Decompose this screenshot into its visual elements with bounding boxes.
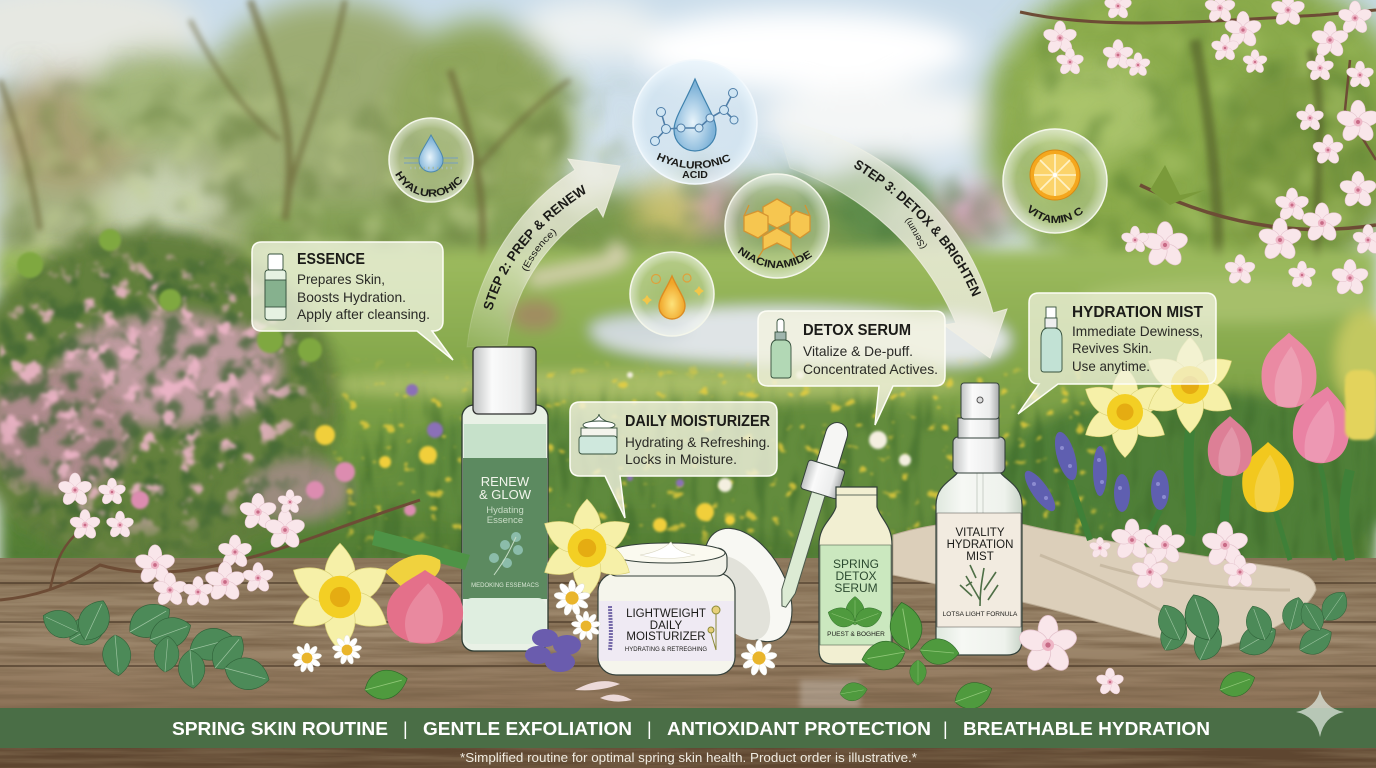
product: essence bottle: & GLOW <box>479 487 532 502</box>
daffodils <box>1079 366 1171 458</box>
product: moisturizer jar <box>598 542 735 675</box>
daffodil and tulip <box>385 555 441 590</box>
product: moisturizer jar: MOISTURIZER <box>626 631 706 643</box>
bottom banner <box>0 708 1376 748</box>
bottom banner: ANTIOXIDANT PROTECTION <box>667 719 931 739</box>
product: essence bottle: RENEW <box>481 474 530 489</box>
callout: detox serum <box>758 311 945 425</box>
sparkle mark <box>1296 690 1344 737</box>
callout: daily moisturizer: Hydrating & Refreshing. <box>625 434 770 450</box>
product: serum bottle: SERUM <box>834 581 878 595</box>
arrow: step 3 detox and brighten: (Serum) <box>902 216 929 251</box>
icon: serum bottle <box>771 319 791 378</box>
product: mist bottle: MIST <box>966 551 994 563</box>
callout: hydration mist: Immediate Dewiness, <box>1072 323 1203 339</box>
callout: essence: ESSENCE <box>297 251 365 268</box>
icon: mist bottle <box>1041 307 1062 372</box>
callout: detox serum: Concentrated Actives. <box>803 361 938 377</box>
product: essence bottle: Hydating <box>486 505 524 516</box>
bubble: niacinamide <box>724 173 830 279</box>
icon: mint leaf <box>825 596 885 631</box>
dropper <box>766 417 858 612</box>
bubble: niacinamide: NIACINAMIDE <box>738 246 812 268</box>
arrow: step 2 prep and renew: STEP 2: PREP & RENEW <box>484 184 586 310</box>
foreground right botanicals <box>361 519 1354 714</box>
callout: detox serum: Vitalize & De-puff. <box>803 343 913 359</box>
bottom banner: GENTLE EXFOLIATION <box>423 719 632 739</box>
callout: essence: Boosts Hydration. <box>297 289 406 305</box>
icon: lavender <box>608 605 613 650</box>
callout: essence: Prepares Skin, <box>297 271 385 287</box>
callout: hydration mist: Revives Skin. <box>1072 340 1152 356</box>
product: serum bottle: PUEST & BOGHER <box>827 631 885 638</box>
tulips <box>1261 333 1317 408</box>
product: serum bottle: DETOX <box>835 569 877 583</box>
wooden table <box>0 558 1376 710</box>
bubble: vitamin c <box>1002 128 1108 234</box>
callout: daily moisturizer <box>570 402 777 518</box>
bubble: hyaluronic small: HYALUROHIC <box>395 170 462 197</box>
callout: hydration mist: HYDRATION MIST <box>1072 304 1203 321</box>
bottom banner: | <box>647 719 652 739</box>
bubble: hyaluronic acid <box>632 60 758 185</box>
lower wood strip <box>0 748 1376 768</box>
bubble: oil droplet <box>630 252 714 336</box>
bottom banner: BREATHABLE HYDRATION <box>963 719 1210 739</box>
icon: essence bottle <box>265 254 286 320</box>
bubble: vitamin c: VITAMIN C <box>1028 204 1083 223</box>
icon: rosemary sprig <box>960 565 998 606</box>
bubble: hyaluronic acid: ACID <box>682 169 708 181</box>
callout: detox serum: DETOX SERUM <box>803 322 911 339</box>
icon: chamomile <box>708 606 720 650</box>
icon: cream jar <box>579 414 617 454</box>
jar lid <box>686 513 810 657</box>
icon: drop with molecule <box>650 79 738 151</box>
icon: golden oil drop <box>642 274 704 319</box>
callout: essence: Apply after cleansing. <box>297 306 430 322</box>
product: essence bottle: Essence <box>487 515 523 526</box>
flowering bush left <box>0 250 315 550</box>
product: dropper and lid <box>686 417 858 657</box>
product: mist bottle <box>936 383 1022 655</box>
background: spring park scene <box>0 0 1376 570</box>
towel <box>893 521 1316 648</box>
product: essence bottle <box>462 347 548 651</box>
muscari <box>1020 429 1169 515</box>
icon: honeycomb <box>744 199 810 258</box>
product: moisturizer jar: DAILY <box>650 620 683 632</box>
callout: daily moisturizer: Locks in Moisture. <box>625 451 737 467</box>
background spring flowers behind products <box>1020 333 1376 560</box>
callout: hydration mist <box>1018 293 1216 414</box>
product: mist bottle: HYDRATION <box>947 539 1013 551</box>
bubble: hyaluronic acid: HYALURONIC <box>656 152 730 169</box>
arrow: step 2 prep and renew <box>466 158 620 348</box>
lavender bunch <box>525 629 581 672</box>
product: moisturizer jar: HYDRATING & RETREGHING <box>625 647 707 653</box>
stems <box>1070 420 1350 560</box>
arrow: step 3 detox and brighten: STEP 3: DETOX & BRIGHTEN <box>854 160 981 297</box>
product: mist bottle: LOTSA LIGHT FORNULA <box>943 611 1018 618</box>
foreground left botanicals <box>0 473 777 695</box>
icon: water drop on skin <box>404 135 458 172</box>
icon: orange slice <box>1030 150 1080 200</box>
bottom banner: | <box>403 719 408 739</box>
bottom banner: | <box>943 719 948 739</box>
product: essence bottle: MEDOKING ESSEMACS <box>471 583 539 589</box>
callout: hydration mist: Use anytime. <box>1072 358 1150 374</box>
arrow: step 2 prep and renew: (Essence) <box>522 229 556 271</box>
icon: eucalyptus sprig <box>489 532 523 575</box>
footnote: *Simplified routine for optimal spring skin health. Product order is illustrative.* <box>460 751 917 765</box>
meadow grass texture <box>340 400 1376 570</box>
callout: essence <box>252 242 453 360</box>
bubble: hyaluronic small <box>388 117 474 203</box>
product: moisturizer jar: LIGHTWEIGHT <box>626 608 706 620</box>
arrow: step 3 detox and brighten <box>786 137 1008 359</box>
callout: daily moisturizer: DAILY MOISTURIZER <box>625 413 770 430</box>
upper right cherry branches <box>1020 0 1376 297</box>
bottom banner: SPRING SKIN ROUTINE <box>172 719 388 739</box>
product: serum bottle: SPRING <box>833 557 879 571</box>
tree foliage mottling <box>0 20 1376 290</box>
product: mist bottle: VITALITY <box>956 527 1005 539</box>
product: serum bottle <box>819 487 892 664</box>
